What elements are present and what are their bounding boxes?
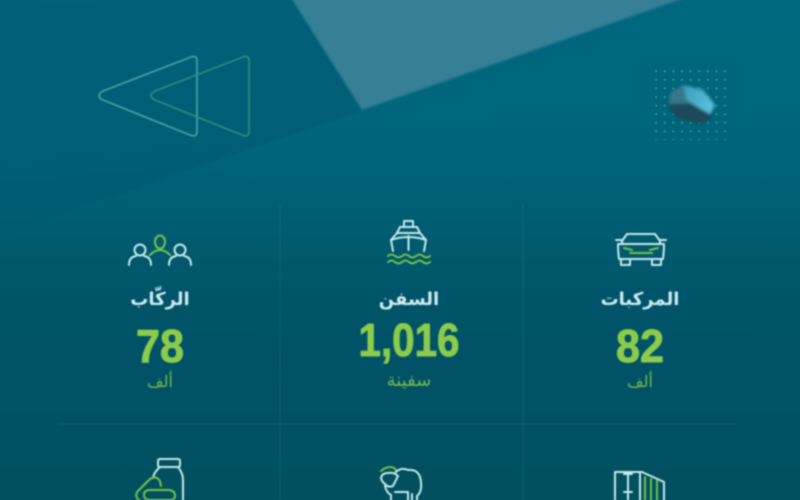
icon: ship — [388, 221, 430, 264]
unit: vehicles: ألف — [627, 371, 653, 391]
icon: sheep — [381, 467, 421, 500]
icon: container — [615, 472, 664, 500]
unit: ships: سفينة — [387, 370, 431, 391]
icon: car — [616, 234, 666, 265]
panel: ships — [358, 221, 460, 391]
icon: passengers — [129, 236, 191, 265]
grid dividers — [58, 204, 735, 500]
icon: pills and bottle — [136, 459, 183, 500]
heading: passengers: الركّاب — [130, 286, 190, 310]
light polygon — [290, 0, 690, 110]
panel: vehicles — [601, 234, 679, 391]
background dark diagonal panel — [0, 0, 700, 239]
decoration: dotted gem — [655, 70, 727, 140]
icon: double triangle outline arrows — [99, 56, 249, 136]
number: passengers: 78 — [136, 320, 184, 372]
number: ships: 1,016 — [358, 314, 460, 366]
heading: ships: السفن — [379, 289, 439, 310]
heading: vehicles: المركبات — [601, 289, 679, 310]
unit: passengers: ألف — [147, 371, 173, 391]
panel: passengers — [129, 236, 191, 391]
number: vehicles: 82 — [616, 320, 664, 372]
